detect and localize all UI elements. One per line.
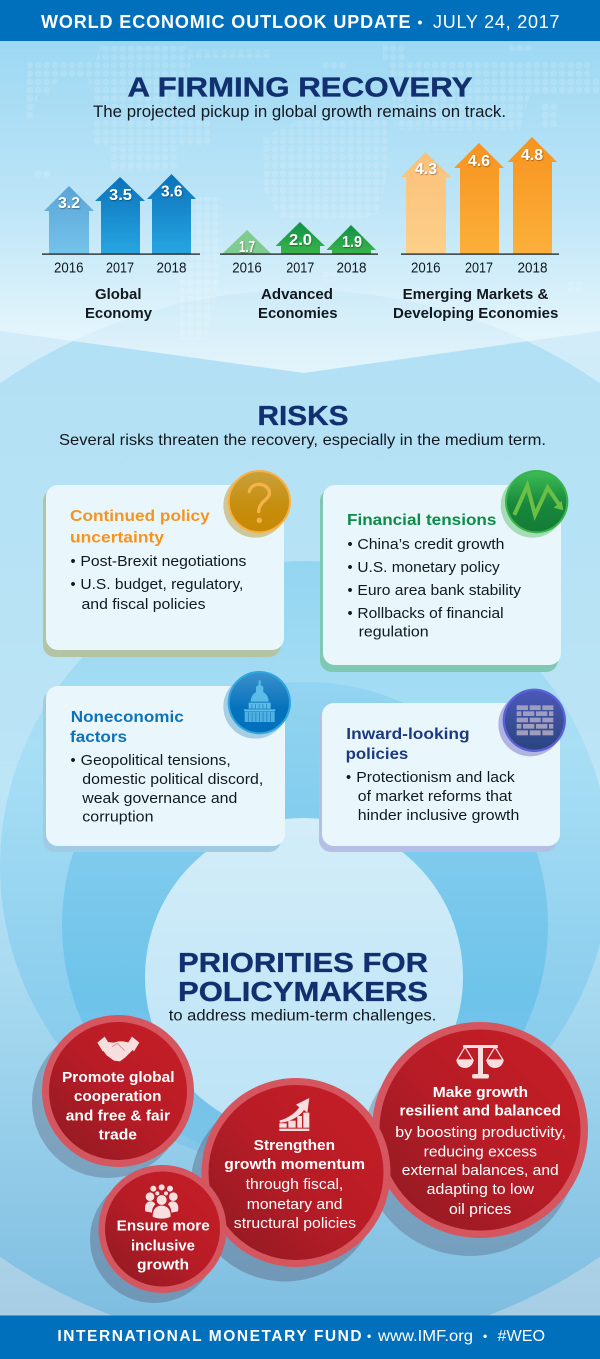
years: advanced: 2018 [336, 260, 366, 276]
text: make growth resilient: oil prices [449, 1202, 511, 1218]
icon: brick wall [498, 689, 566, 756]
bullet list: financial tensions: • [348, 560, 353, 576]
values: global [58, 184, 183, 212]
heading: policy uncertainty: Continued policy [70, 508, 210, 525]
text: ensure more inclusive growth: inclusive [131, 1239, 195, 1255]
header banner [0, 0, 600, 41]
bullet list: financial tensions: Rollbacks of financial [357, 606, 504, 622]
icon: capitol building [223, 671, 291, 739]
header banner: JULY 24, 2017 [433, 12, 560, 32]
arrow: global 2018 [147, 174, 196, 254]
text: make growth resilient: adapting to low [427, 1182, 535, 1198]
values: emerging: 4.8 [521, 147, 543, 164]
footer banner: #WEO [498, 1328, 545, 1345]
label: advanced economies: Economies [258, 306, 338, 322]
subtitle: recovery: The projected pickup in global growth remains on track. [93, 102, 506, 121]
label: emerging markets [393, 287, 558, 322]
heading: inward-looking policies: Inward-looking [346, 726, 470, 743]
footer banner: INTERNATIONAL MONETARY FUND [57, 1328, 362, 1345]
heading: inward-looking policies [346, 726, 470, 763]
label: global economy: Global [95, 287, 142, 303]
footer banner: • [367, 1329, 371, 1343]
circle: promote global cooperation [32, 1015, 194, 1178]
text: strengthen growth momentum: Strengthen [254, 1138, 335, 1154]
footer banner: • [483, 1329, 487, 1343]
heading: noneconomic factors [70, 709, 184, 746]
text: make growth resilient: by boosting productivity, [395, 1125, 566, 1141]
values: global: 3.2 [58, 195, 80, 212]
text: make growth resilient: external balances, and [402, 1163, 559, 1179]
heading: policy uncertainty [70, 508, 210, 547]
arrow: emerging 2018 [508, 137, 557, 254]
icon: rising bar chart [279, 1098, 309, 1131]
circle: ensure more inclusive growth [90, 1165, 226, 1303]
values: advanced: 2.0 [289, 232, 312, 249]
bullet list: policy uncertainty: • [70, 554, 76, 570]
world map dot pattern [26, 43, 600, 340]
heading: priorities for policymakers: PRIORITIES FOR [178, 947, 428, 978]
years: global [54, 260, 186, 276]
label: emerging markets: Developing Economies [393, 306, 558, 322]
years: emerging: 2016 [411, 260, 440, 276]
text: ensure more inclusive growth [117, 1219, 210, 1273]
heading: inward-looking policies: policies [346, 746, 408, 763]
icon: question mark [223, 470, 291, 538]
icon: group of people [145, 1184, 178, 1219]
text: strengthen growth momentum [224, 1138, 365, 1232]
bullet list: financial tensions: China’s credit growth [357, 537, 504, 553]
years: emerging: 2017 [465, 260, 493, 276]
circle: make growth resilient and balanced [362, 1022, 588, 1256]
bullet list: noneconomic factors [70, 753, 263, 826]
text: promote global cooperation: cooperation [74, 1089, 162, 1105]
arrow: advanced 2017 [276, 222, 325, 254]
bullet list: financial tensions: • [348, 537, 353, 553]
values: emerging [415, 147, 543, 178]
values: emerging: 4.6 [468, 153, 490, 170]
panel: financial tensions [320, 485, 561, 672]
heading: policy uncertainty: uncertainty [70, 530, 164, 547]
label: global economy: Economy [85, 306, 152, 322]
header banner: WORLD ECONOMIC OUTLOOK UPDATE [41, 12, 410, 32]
bullet list: policy uncertainty: Post-Brexit negotiations [80, 554, 246, 570]
arrow: emerging 2017 [454, 143, 504, 254]
chart: advanced economies [220, 222, 378, 322]
arrow: advanced 2016 [222, 230, 272, 254]
footer banner [0, 1316, 600, 1359]
icon: zigzag market line [501, 470, 568, 538]
text: promote global cooperation: and free & fair [66, 1109, 170, 1125]
panel: noneconomic factors [43, 686, 285, 852]
circle: strengthen growth momentum [190, 1078, 390, 1282]
heading: priorities for policymakers [178, 947, 428, 1007]
header banner: • [418, 14, 422, 30]
label: emerging markets: Emerging Markets & [403, 287, 549, 303]
text: make growth resilient: reducing excess [424, 1144, 537, 1160]
bullet list: noneconomic factors: domestic political discord, [82, 772, 263, 788]
bullet list: noneconomic factors: Geopolitical tensions, [81, 753, 231, 769]
heading: risks: RISKS [258, 400, 348, 431]
bullet list: inward-looking policies [346, 770, 519, 824]
years: global: 2017 [106, 260, 134, 276]
years: global: 2016 [54, 260, 84, 276]
bullet list: financial tensions: regulation [359, 625, 429, 641]
bullet list: inward-looking policies: hinder inclusive growth [358, 808, 519, 824]
text: strengthen growth momentum: monetary and [247, 1197, 342, 1213]
chart: emerging markets [393, 137, 559, 322]
values: global: 3.5 [109, 187, 132, 204]
bullet list: noneconomic factors: • [70, 753, 76, 769]
bullet list: policy uncertainty [70, 554, 246, 613]
label: global economy [85, 287, 152, 322]
years: advanced: 2017 [286, 260, 314, 276]
values: advanced: 1.7 [239, 239, 255, 256]
text: make growth resilient: resilient and balanced [400, 1104, 561, 1120]
bullet list: financial tensions: U.S. monetary policy [357, 560, 501, 576]
text: ensure more inclusive growth: Ensure more [117, 1219, 210, 1235]
icon: handshake [97, 1037, 139, 1061]
years: emerging [411, 260, 548, 276]
panel: inward-looking policies [319, 703, 560, 852]
bullet list: noneconomic factors: corruption [82, 810, 154, 826]
arrow: emerging 2016 [401, 152, 451, 254]
bullet list: financial tensions: • [348, 583, 353, 599]
bullet list: inward-looking policies: Protectionism and lack [356, 770, 516, 786]
heading: priorities for policymakers: POLICYMAKERS [178, 976, 428, 1007]
values: advanced: 1.9 [342, 234, 362, 251]
text: promote global cooperation: Promote global [62, 1070, 174, 1086]
text: ensure more inclusive growth: growth [137, 1257, 189, 1273]
heading: noneconomic factors: factors [70, 729, 127, 746]
arrow: global 2016 [44, 186, 94, 254]
title: a firming recovery: A FIRMING RECOVERY [128, 72, 472, 103]
values: emerging: 4.3 [415, 161, 437, 178]
bullet list: policy uncertainty: and fiscal policies [82, 597, 206, 613]
label: advanced economies [258, 287, 338, 322]
bullet list: financial tensions [348, 537, 522, 641]
panel: continued policy uncertainty [43, 485, 284, 657]
bullet list: policy uncertainty: • [70, 577, 76, 593]
footer banner: www.IMF.org [377, 1328, 473, 1345]
text: make growth resilient: Make growth [433, 1085, 528, 1101]
bullet list: inward-looking policies: • [346, 770, 351, 786]
bullet list: noneconomic factors: weak governance and [81, 791, 237, 807]
subtitle: priorities: to address medium-term challenges. [169, 1008, 436, 1025]
bullet list: policy uncertainty: U.S. budget, regulatory, [80, 577, 243, 593]
text: strengthen growth momentum: growth momentum [224, 1157, 365, 1173]
bullet list: financial tensions: • [348, 606, 353, 622]
arrow: global 2017 [95, 177, 145, 254]
years: emerging: 2018 [518, 260, 548, 276]
text: promote global cooperation: trade [99, 1127, 137, 1143]
heading: noneconomic factors: Noneconomic [71, 709, 184, 726]
heading: financial tensions: Financial tensions [347, 512, 497, 529]
values: advanced [239, 232, 362, 256]
text: strengthen growth momentum: structural policies [234, 1216, 356, 1232]
icon: balance scale [456, 1045, 504, 1078]
years: global: 2018 [156, 260, 186, 276]
values: global: 3.6 [161, 184, 183, 201]
bullet list: financial tensions: Euro area bank stability [357, 583, 522, 599]
subtitle: risks: Several risks threaten the recovery, especially in the medium term. [59, 432, 546, 449]
label: advanced economies: Advanced [261, 287, 333, 303]
text: promote global cooperation [62, 1070, 174, 1143]
arrow: advanced 2018 [326, 225, 376, 254]
chart: global economy [42, 174, 200, 322]
text: strengthen growth momentum: through fiscal, [246, 1177, 343, 1193]
years: advanced [232, 260, 366, 276]
text: make growth resilient [395, 1085, 566, 1218]
bullet list: inward-looking policies: of market reforms that [358, 789, 512, 805]
years: advanced: 2016 [232, 260, 262, 276]
